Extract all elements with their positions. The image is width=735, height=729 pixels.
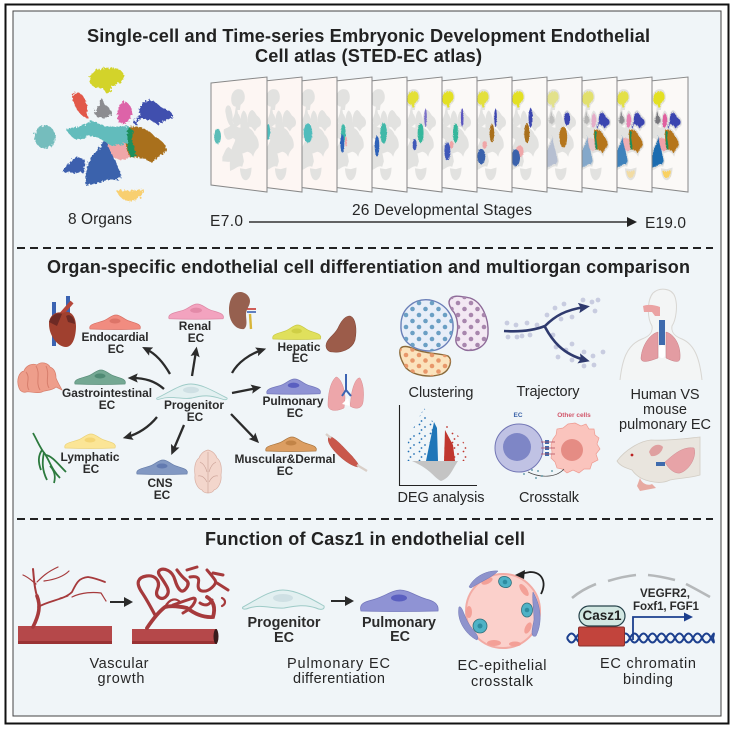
arrow: differentiation [331,596,354,606]
panel: stage 2 [246,77,302,192]
illustration: human lungs [620,289,702,380]
label: E19.0: E19.0 [645,215,686,232]
title: Cell atlas (STED-EC atlas) [255,46,482,66]
arrows from progenitor EC [127,349,262,451]
panel: stage 6 [387,77,442,192]
divider [17,518,713,520]
cell: pulmonary EC large [361,590,438,612]
label: vascular growth: Vascular [90,656,149,672]
illustration: EC chromatin binding: Foxf1, FGF1 [633,600,700,613]
labels: EC types: EC [188,331,205,345]
cell: endocardial EC [90,315,140,330]
label: EC chromatin binding [600,656,696,688]
labels: EC types: EC [187,410,204,424]
labels: EC types: Hepatic [278,340,321,354]
label: 26 developmental stages: 26 Developmental Stages [352,202,532,219]
cell: lymphatic EC [65,434,115,448]
icon: lungs [328,374,364,410]
label: human vs mouse: pulmonary EC [619,417,711,433]
label: EC-epithelial crosstalk: EC-epithelial [458,658,546,674]
label: human vs mouse [619,387,711,433]
cell: CNS EC [137,460,187,474]
label: pulmonary EC [362,615,436,645]
labels: EC types: Gastrointestinal [62,386,152,400]
label: pulmonary EC differentiation [287,656,390,687]
label: DEG analysis: DEG analysis [398,490,484,506]
panel: stage 5 [352,77,407,192]
panel: stage 4 [317,77,372,192]
label: progenitor EC: EC [274,630,294,646]
cell: progenitor EC large [242,590,324,609]
arrow: growth [110,597,133,607]
icon: intestine [18,363,62,393]
label: pulmonary EC: EC [390,629,410,645]
title [87,26,650,66]
cell: renal EC [169,304,223,319]
icon: brain [195,450,221,493]
labels: EC types: Pulmonary [262,394,324,408]
illustration: crosstalk: Other cells [557,412,591,419]
illustration: mouse with lungs [617,437,700,491]
chart: trajectory [504,298,605,368]
labels: EC types: EC [277,464,294,478]
panel: Casz1 function [18,567,714,690]
labels: EC types: CNS [147,476,173,490]
labels: EC types: Renal [179,319,211,333]
stacked time-series UMAP panels [211,77,688,192]
panel: stage 3 [282,77,337,192]
divider [17,247,713,249]
illustration: crosstalk: EC [513,412,523,419]
labels: EC types [60,319,336,502]
label: human vs mouse: Human VS [630,387,700,403]
labels: EC types: Lymphatic [60,450,120,464]
icon: lymphatic vessels [33,433,66,483]
icon: kidney [229,292,256,329]
illustration: EC-epithelial crosstalk [459,570,544,648]
labels: EC types: EC [99,398,116,412]
labels: EC types: Endocardial [82,330,148,344]
title: Single-cell and Time-series Embryonic Development Endothelial [87,26,650,46]
cell: muscular and dermal EC [266,437,316,452]
label: EC chromatin binding: EC chromatin [600,656,696,672]
labels: EC types: Progenitor [164,398,224,412]
label: pulmonary EC differentiation: differentiation [293,671,385,687]
labels: EC types: EC [287,406,304,420]
illustration: EC chromatin binding: VEGFR2, [640,587,690,600]
label: EC-epithelial crosstalk [458,658,546,690]
panel: stage 10 [527,77,582,192]
section heading: organ-specific: Organ-specific endothelial cell differentiation and multiorgan comparison [47,257,690,277]
icon: muscle [326,434,367,471]
label: EC-epithelial crosstalk: crosstalk [471,674,534,690]
illustration: sparse vessel [18,567,112,644]
label: pulmonary EC: Pulmonary [362,615,436,631]
labels: EC types: EC [154,488,171,502]
labels: EC types: Muscular&Dermal [234,452,336,466]
panel: stage 1 [211,77,267,192]
icon: liver [326,316,356,352]
panel: stage 13 [632,77,688,192]
labels: EC types: EC [108,342,125,356]
labels: EC types: EC [83,462,100,476]
illustration: dense tortuous vessel [132,567,228,644]
panel: stage 12 [597,77,652,192]
timeline arrow [249,217,637,227]
label: progenitor EC [248,615,321,646]
panel: stage 7 [422,77,477,192]
label: 8 organs: 8 Organs [68,211,132,228]
panel: stage 11 [562,77,617,192]
illustration: EC chromatin binding: Casz1 [582,608,622,623]
icon: heart [49,296,76,347]
panel: stage 8 [457,77,512,192]
panel: organ-specific differentiation [18,289,711,506]
label: crosstalk: Crosstalk [519,490,580,506]
label: EC chromatin binding: binding [623,672,673,688]
label: human vs mouse: mouse [643,402,687,418]
panel: stage 9 [492,77,547,192]
label: progenitor EC: Progenitor [248,615,321,631]
label: vascular growth: growth [98,671,144,687]
UMAP of 8 organs [34,68,173,201]
cell: progenitor EC [157,384,227,400]
cell: gastrointestinal EC [75,370,125,384]
label: trajectory: Trajectory [516,384,580,400]
illustration: EC chromatin binding [567,575,714,646]
cell: pulmonary EC [267,379,320,394]
cell: hepatic EC [273,325,321,340]
label: E7.0: E7.0 [210,213,243,230]
label: vascular growth [90,656,149,687]
chart: clustering [400,296,488,376]
label: clustering: Clustering [408,385,474,401]
labels: EC types: EC [292,351,309,365]
label: pulmonary EC differentiation: Pulmonary EC [287,656,390,672]
illustration: crosstalk [495,412,600,479]
chart: DEG volcano plot [400,405,477,486]
section heading: Casz1 function: Function of Casz1 in endothelial cell [205,529,525,549]
